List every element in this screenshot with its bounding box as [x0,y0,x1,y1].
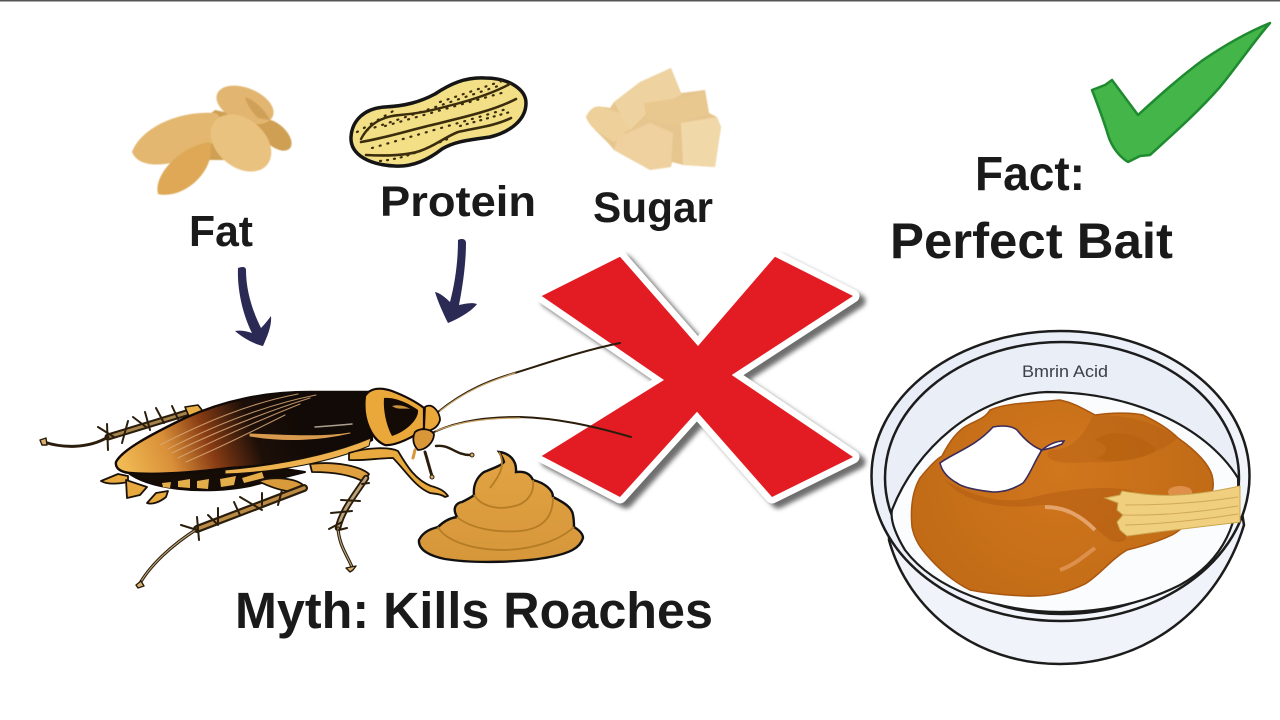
icon: red X [542,257,859,502]
caramel bait [911,400,1213,596]
icon: fat nuts [132,78,297,195]
pronotum [364,389,424,445]
middle leg [310,463,369,482]
bowl body [889,500,1244,664]
illustration: peanut butter mound [419,452,583,562]
illustration: bowl of bait [872,331,1250,664]
arrow: protein to roach [435,239,477,323]
cerci [101,474,128,484]
white patch [940,426,1064,492]
wing streaks [160,394,352,462]
icon: green check mark [1092,23,1270,162]
bowl inner surface [892,392,1238,612]
head [424,406,440,431]
heading: sugar: Sugar [593,184,713,232]
wooden brush [1105,486,1240,536]
heading: myth: Myth: Kills Roaches [235,582,713,639]
front leg [349,448,448,497]
bowl rim [872,331,1250,621]
lower hind leg [258,478,305,492]
icon: peanut [351,78,526,166]
caramel folds [945,480,1135,542]
icon: sugar cubes [586,68,721,170]
antennae [434,343,631,437]
palps [413,446,474,479]
heading: fact: Fact: [975,148,1085,201]
arrow: fat to roach [235,267,271,346]
wing lower band [225,438,371,474]
heading: protein: Protein [380,178,536,226]
heading: fat: Fat [189,207,253,256]
wing [116,392,372,474]
illustration: cockroach [40,343,631,588]
abdomen [125,462,305,490]
bowl label: Bmrin Acid [1022,362,1108,381]
upper hind leg [40,406,193,450]
heading: perfect bait: Perfect Bait [890,213,1173,269]
